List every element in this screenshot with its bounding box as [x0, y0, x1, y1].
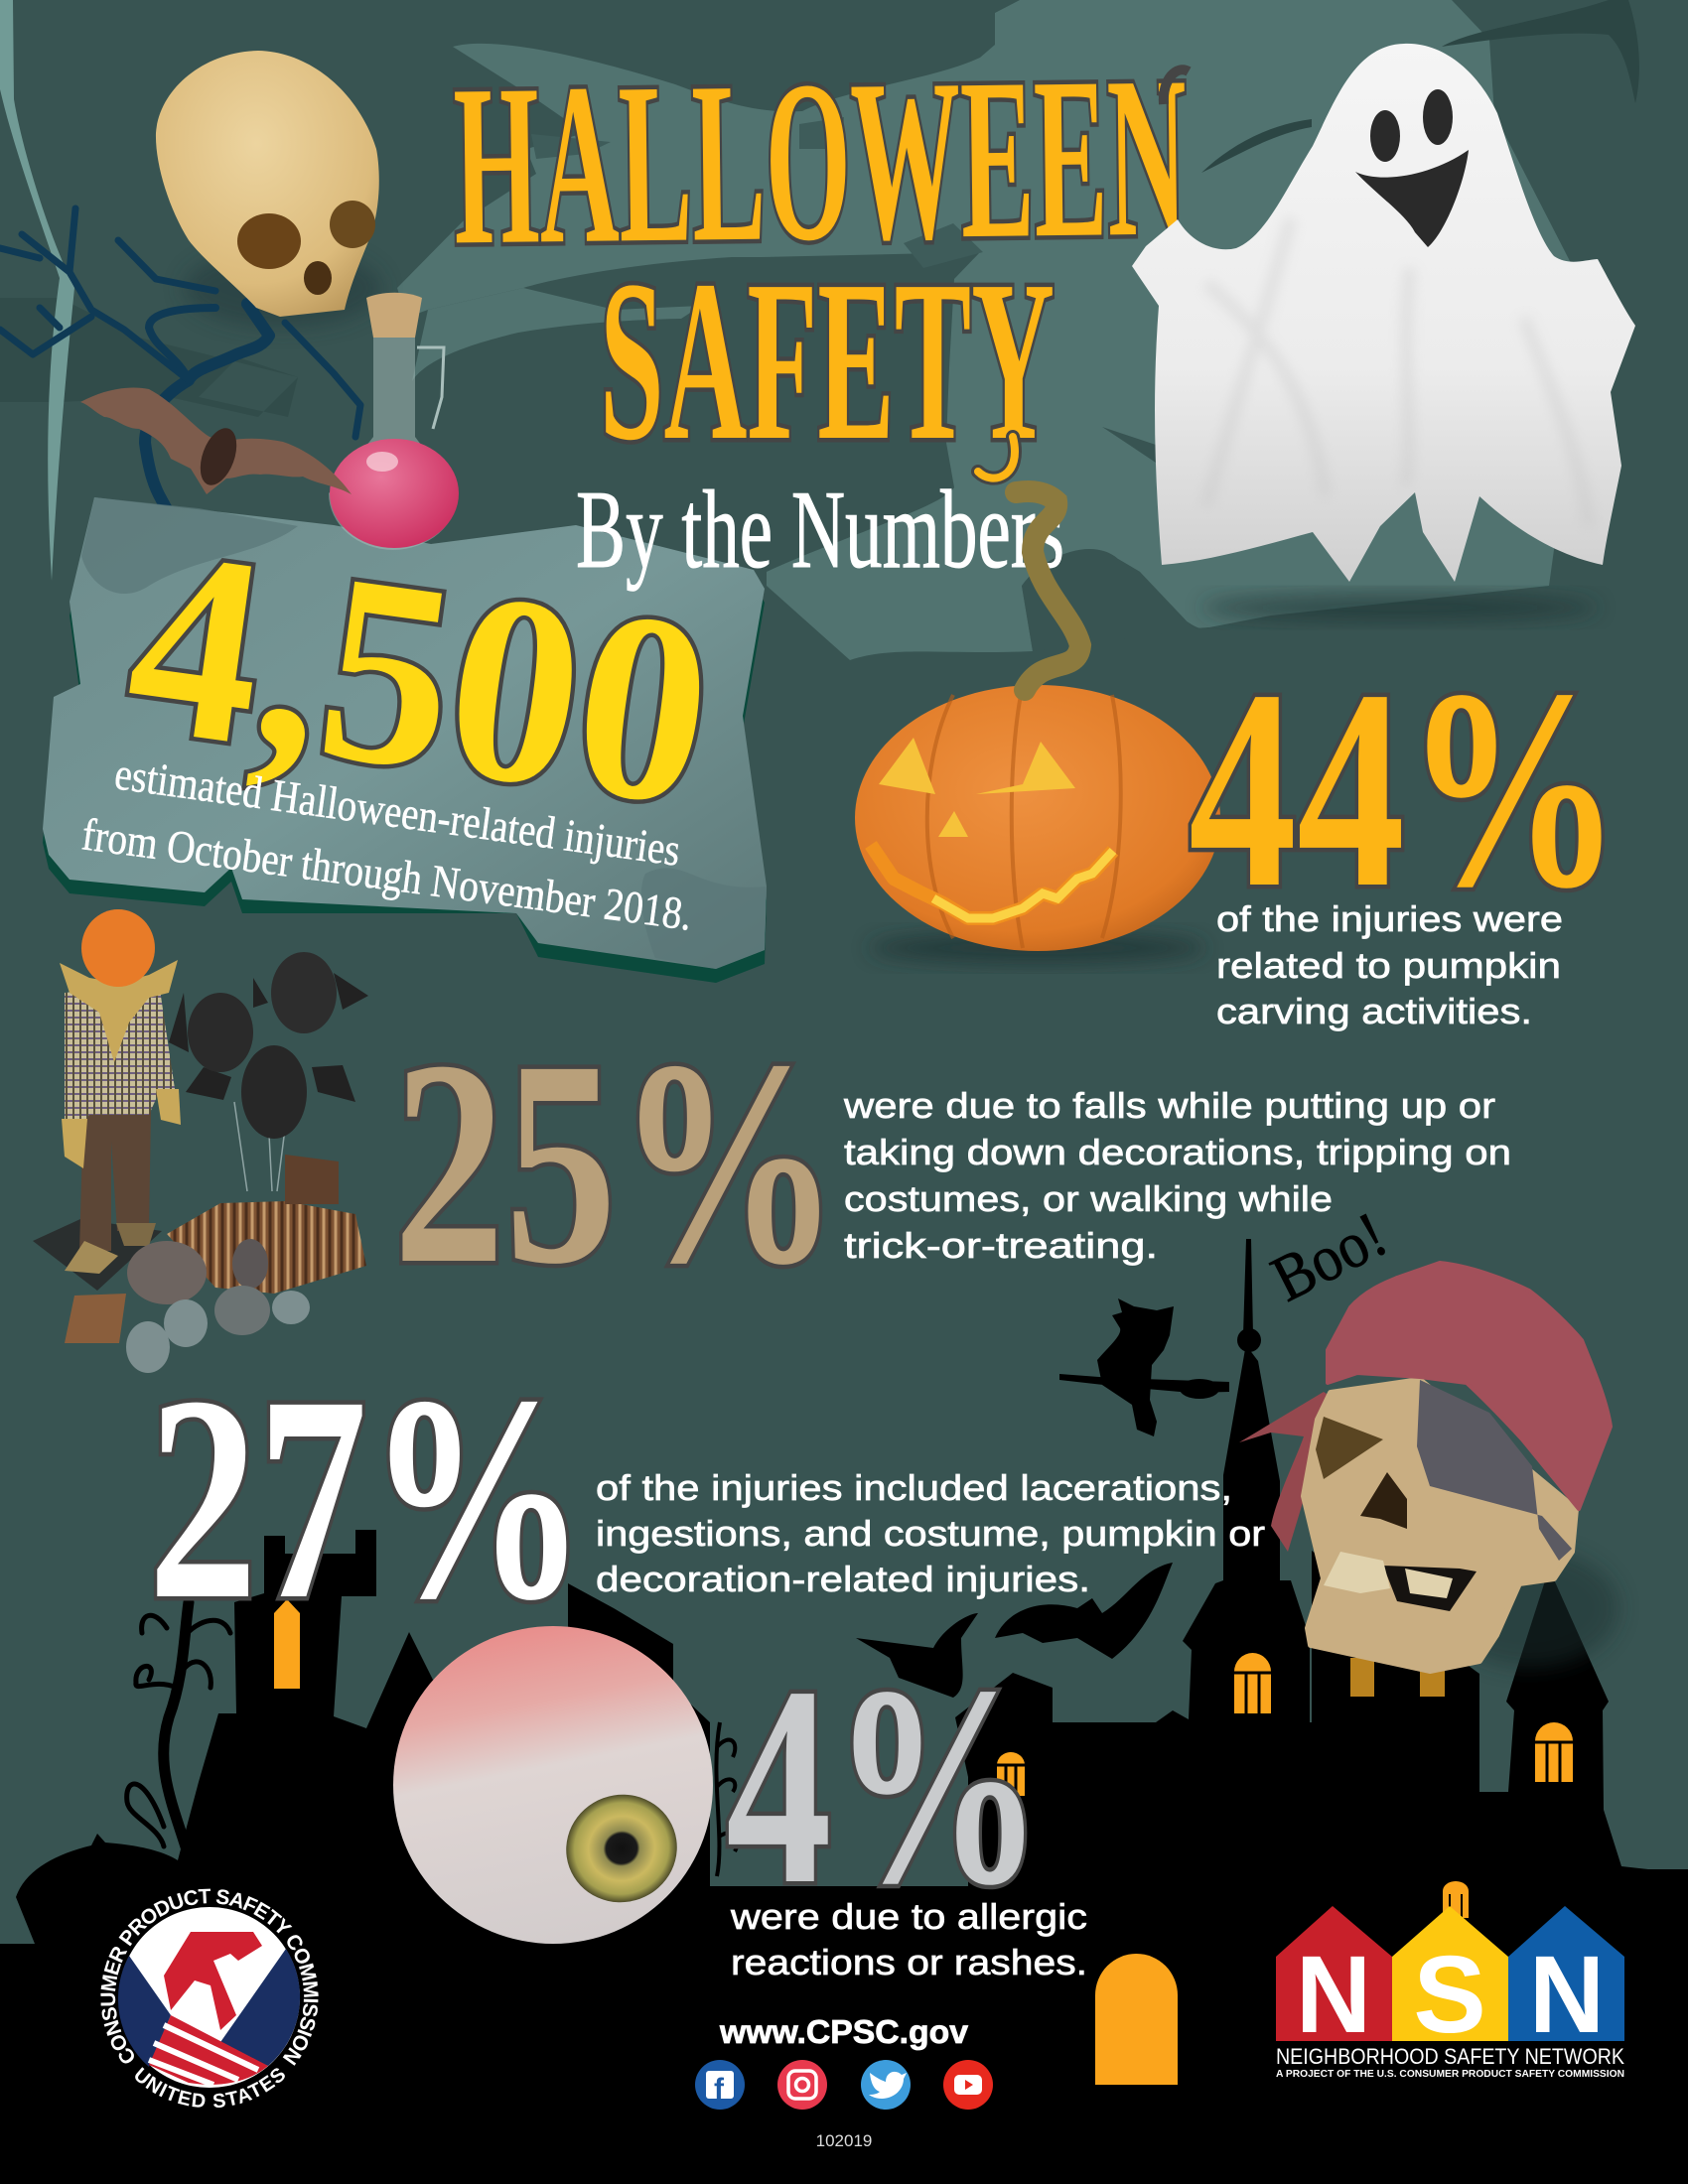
social: twitter — [861, 2060, 911, 2110]
window panes under skull — [1350, 1658, 1445, 1697]
scarecrow and props — [33, 909, 368, 1373]
blue house — [1508, 1906, 1624, 2041]
window: left tower — [274, 1599, 300, 1689]
Boo label: Boo! — [1261, 1198, 1398, 1315]
social: facebook — [695, 2060, 745, 2110]
cupola — [1443, 1881, 1469, 1918]
window: small — [997, 1752, 1025, 1796]
title — [453, 29, 1189, 488]
eagle — [164, 1932, 262, 2030]
subtitle: By the Numbers — [576, 469, 1064, 592]
27% text: decoration-related injuries. — [596, 1559, 1090, 1599]
eye socket — [1316, 1417, 1383, 1479]
logo name: NEIGHBORHOOD SAFETY NETWORK — [1276, 2044, 1624, 2069]
25% text: were due to falls while putting up or — [843, 1085, 1495, 1126]
25% text: costumes, or walking while — [844, 1178, 1333, 1219]
seal text lower: UNITED STATES — [135, 2067, 285, 2108]
date code: 102019 — [816, 2131, 872, 2150]
stat: 4,500: 4,500 — [113, 490, 727, 864]
stat: 4%: 4% — [726, 1628, 1044, 1944]
house silhouette — [0, 1239, 1688, 2184]
bandana tail — [1239, 1392, 1336, 1552]
44% text: of the injuries were — [1216, 898, 1563, 939]
curly tree silhouette — [127, 1602, 230, 1856]
seal text: CONSUMER PRODUCT SAFETY COMMISSION — [100, 1888, 319, 2066]
25% text: taking down decorations, tripping on — [844, 1132, 1511, 1172]
caption: estimated Halloween-related injuries — [112, 748, 683, 876]
letters: N — [1529, 1934, 1605, 2056]
4% text: were due to allergic — [730, 1896, 1087, 1937]
skull — [156, 51, 379, 317]
bandana — [1328, 1263, 1611, 1509]
nose — [1360, 1472, 1407, 1529]
CPSC logo — [100, 1888, 319, 2108]
ghost — [1132, 44, 1635, 621]
pants — [79, 1109, 151, 1251]
window: center — [1234, 1653, 1271, 1713]
balloons — [169, 952, 368, 1191]
yellow house — [1392, 1906, 1508, 2041]
witch silhouette — [1059, 1298, 1229, 1436]
44% text: carving activities. — [1216, 991, 1532, 1031]
website: www.CPSC.gov — [719, 2013, 969, 2050]
window: right — [1535, 1722, 1573, 1782]
social: youtube — [943, 2060, 993, 2110]
pumpkin — [855, 491, 1220, 964]
jars — [126, 1239, 310, 1373]
44% text: related to pumpkin — [1216, 945, 1561, 986]
25% text — [843, 1085, 1511, 1266]
logo tagline: A PROJECT OF THE U.S. CONSUMER PRODUCT SAFETY COMMISSION — [1276, 2069, 1624, 2080]
stripes — [149, 2015, 268, 2085]
4% text: reactions or rashes. — [731, 1942, 1087, 1982]
tree branches — [0, 208, 360, 586]
shirt — [65, 983, 177, 1122]
teeth — [1324, 1552, 1453, 1598]
caption — [79, 748, 695, 940]
seal disk — [119, 1907, 300, 2088]
scroll — [65, 1294, 126, 1343]
books — [167, 1155, 366, 1294]
small tree silhouette — [716, 1722, 738, 1876]
jaw and skull — [1304, 1380, 1576, 1671]
straw — [60, 960, 181, 1274]
44% text — [1216, 898, 1563, 1031]
navy field — [118, 1949, 300, 2067]
bat — [80, 388, 352, 494]
pumpkin head — [81, 909, 155, 987]
mouth — [1383, 1566, 1477, 1611]
bat silhouette — [995, 1563, 1173, 1659]
27% text: of the injuries included lacerations, — [596, 1467, 1232, 1508]
potion bottle — [329, 293, 459, 550]
witch hat silhouette — [856, 1613, 978, 1698]
title: SAFETY — [600, 233, 1055, 488]
25% text: trick-or-treating. — [844, 1225, 1158, 1266]
eyeball — [393, 1626, 713, 1944]
mat — [33, 1219, 162, 1291]
social: instagram — [777, 2060, 827, 2110]
pirate skull — [1239, 1263, 1618, 1671]
eye patch — [1417, 1380, 1572, 1561]
letters: S — [1413, 1934, 1486, 2056]
red house — [1276, 1906, 1392, 2041]
social: facebook: f — [714, 2073, 725, 2106]
27% text: ingestions, and costume, pumpkin or — [596, 1513, 1265, 1554]
caption: from October through November 2018. — [79, 808, 695, 940]
NSN logo — [1276, 1881, 1624, 2080]
tombstone — [1095, 1954, 1178, 2085]
skull shadow — [184, 248, 382, 328]
stone plaque — [43, 497, 767, 983]
stat: 25%: 25% — [393, 1000, 840, 1324]
stat: 27%: 27% — [148, 1335, 587, 1660]
letters: N — [1296, 1934, 1371, 2056]
letters — [1296, 1934, 1605, 2056]
4% text — [730, 1896, 1087, 1982]
27% text — [596, 1467, 1265, 1599]
